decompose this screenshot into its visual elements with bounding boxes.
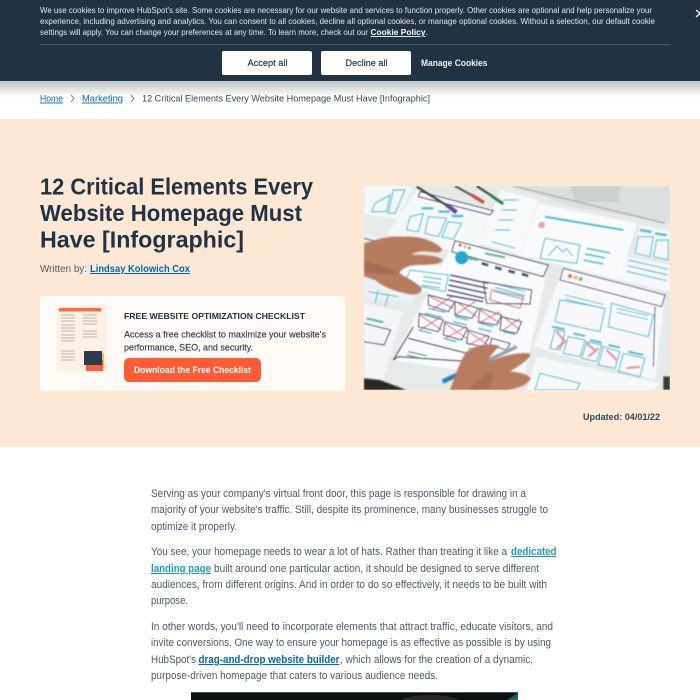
paragraph 3: , which allows for the creation of a dynamic,: [340, 654, 533, 666]
cookie notice text: Cookie Policy: [370, 27, 426, 37]
laptop: [510, 186, 670, 223]
cookie notice text: We use cookies to improve HubSpot's site. Some cookies are necessary for our website and services to function properly. Other cookies are optional and help personalize your: [40, 5, 652, 15]
author byline: Lindsay Kolowich Cox: [90, 263, 190, 275]
icon: checklist document thumbnail: [57, 305, 107, 371]
title: Website Homepage Must: [40, 200, 302, 226]
paragraph 1: majority of your website's traffic. Still, despite its prominence, many businesses struggle to: [151, 504, 548, 516]
title: 12 Critical Elements Every: [40, 174, 313, 200]
cookie banner: [0, 0, 700, 81]
paragraph 2: built around one particular action, it should be designed to serve different: [214, 563, 539, 575]
button: decline all: [321, 51, 411, 75]
checklist description: Access a free checklist to maximize your website's: [124, 330, 326, 340]
paragraph 2: [151, 546, 556, 607]
button: accept all: [222, 51, 312, 75]
checklist heading: FREE WEBSITE OPTIMIZATION CHECKLIST: [124, 311, 306, 321]
paragraph 3: drag-and-drop website builder: [198, 654, 340, 666]
panel: checklist call to action: [40, 296, 345, 391]
checklist description: [124, 330, 326, 354]
paragraph 2: audiences, from different origins. And in order to do so effectively, it needs to be built with: [151, 579, 547, 591]
paragraph 3: [151, 621, 553, 682]
update date: Updated: 04/01/22: [583, 412, 660, 422]
paragraph 3: HubSpot's: [151, 654, 196, 666]
author byline: Written by:: [40, 263, 87, 275]
wireframe lines: [364, 190, 668, 390]
button: accept all: Accept all: [248, 58, 288, 68]
title: Have [Infographic]: [40, 226, 244, 252]
paragraph 1: [151, 488, 548, 533]
breadcrumb link: Marketing: Marketing: [82, 94, 123, 104]
icon: close: [696, 10, 700, 17]
paragraph 3: purpose-driven homepage that caters to various audience needs.: [151, 670, 438, 682]
infographic image top edge: [191, 692, 518, 700]
author byline: [40, 263, 190, 275]
button: download checklist: Download the Free Checklist: [134, 365, 251, 375]
paragraph 2: You see, your homepage needs to wear a lot of hats. Rather than treating it like a: [151, 546, 507, 558]
title: [40, 174, 313, 252]
checklist description: performance, SEO, and security.: [124, 342, 253, 354]
markers: [416, 186, 448, 207]
paragraph 2: landing page: [151, 563, 211, 575]
breadcrumb current page: 12 Critical Elements Every Website Homepage Must Have [Infographic]: [142, 94, 430, 104]
pen: [488, 344, 518, 362]
breadcrumb: [0, 81, 700, 104]
article text: [151, 488, 556, 682]
paragraph 2: dedicated: [511, 546, 556, 558]
left hand: [364, 236, 443, 294]
cookie notice text: experience, including advertising and analytics. You can consent to all cookies, decline all optional cookies, or manage optional cookies. Without a selection, our default cookie: [40, 16, 655, 26]
papers: [364, 186, 414, 219]
paragraph 3: In other words, you'll need to incorporate elements that attract traffic, educate visitors, and: [151, 621, 553, 633]
manage cookies link: Manage Cookies: [421, 58, 488, 68]
button: decline all: Decline all: [346, 58, 388, 68]
breadcrumb link: Home: Home: [40, 94, 63, 104]
cookie notice text: [40, 5, 655, 37]
right hand: [450, 345, 531, 390]
paragraph 3: invite conversions. One way to ensure your homepage is as effective as possible is by using: [151, 637, 551, 649]
paragraph 2: purpose.: [151, 595, 188, 607]
paragraph 1: optimize it properly.: [151, 521, 237, 533]
paragraph 1: Serving as your company's virtual front door, this page is responsible for drawing in a: [151, 488, 526, 500]
photo: hands on website wireframe sketches: [364, 186, 670, 390]
cookie notice text: .: [426, 27, 428, 37]
hero panel: [0, 119, 700, 447]
button: download checklist: [124, 358, 261, 382]
cookie notice text: settings will apply. You can change your preferences at any time. To learn more, check out our: [40, 27, 368, 37]
